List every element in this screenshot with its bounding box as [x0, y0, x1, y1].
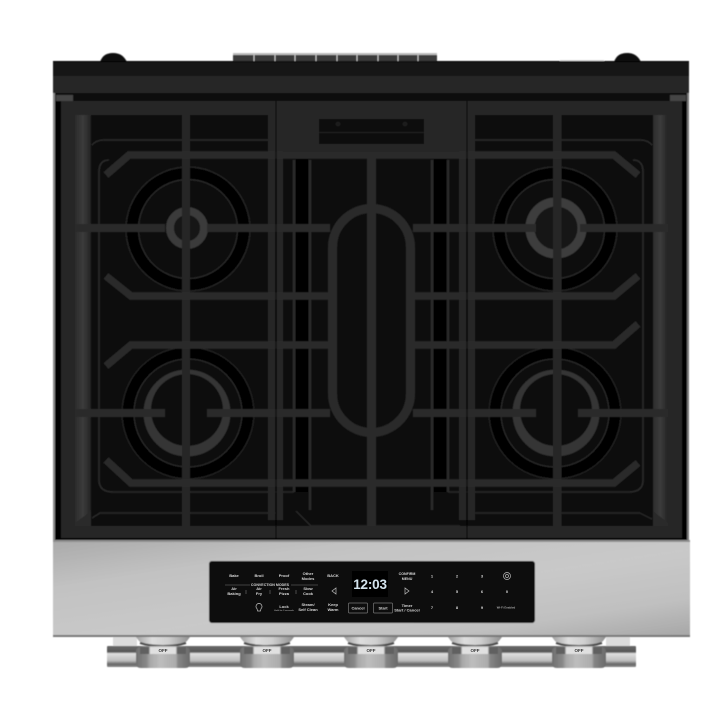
rear vent and feet — [100, 53, 641, 62]
knob labels: OFF — [262, 648, 272, 653]
handle rail — [107, 646, 636, 667]
lower function labels: Self Clean — [298, 607, 318, 612]
burner: rear left — [126, 167, 250, 291]
knob 4 — [448, 637, 502, 668]
convection labels: Slow — [303, 586, 314, 591]
start button — [374, 603, 392, 613]
icon: light bulb — [256, 604, 262, 611]
keypad: 5 — [456, 589, 459, 594]
cooking mode labels: Other — [303, 571, 314, 576]
cooking mode labels: BACK — [327, 573, 339, 578]
cooktop body — [53, 61, 689, 541]
clock display — [352, 571, 388, 597]
knobs — [136, 637, 606, 668]
seams — [276, 101, 467, 538]
knob 2 — [240, 637, 294, 668]
knob labels — [158, 648, 584, 653]
knob 5 — [552, 637, 606, 668]
keypad: 9 — [481, 605, 484, 610]
cooktop surface — [91, 115, 653, 526]
centre vertical bars — [268, 151, 275, 520]
side edges — [53, 93, 55, 540]
cancel button: Cancel — [351, 606, 365, 610]
brackets — [113, 637, 137, 648]
keypad: 2 — [456, 574, 459, 578]
burner: rear right — [493, 167, 617, 291]
convection labels — [227, 586, 314, 596]
keypad: 3 — [481, 574, 484, 578]
knob labels: OFF — [574, 648, 584, 653]
keypad: 8 — [456, 605, 459, 610]
confirm menu and timer: Timer — [402, 603, 413, 608]
burner: front right — [489, 347, 621, 479]
convection modes heading: CONVECTION MODES — [251, 583, 290, 587]
knob 3 — [344, 637, 398, 668]
convection labels: Air — [231, 586, 237, 591]
surface contour lines — [92, 140, 652, 526]
keypad: 6 — [481, 589, 484, 594]
knob labels: OFF — [158, 648, 168, 653]
lower function labels: Lock — [279, 604, 289, 609]
burner crossing verticals — [182, 115, 190, 526]
centre oval ring — [332, 208, 410, 432]
lower function labels — [274, 602, 339, 612]
cast iron grates — [61, 101, 682, 538]
steel control fascia — [53, 540, 690, 637]
keypad — [431, 574, 509, 610]
confirm menu and timer — [394, 572, 420, 612]
confirm menu and timer: MENU — [402, 577, 413, 581]
icon: settings ring — [504, 572, 510, 580]
convection labels: Air — [256, 586, 262, 591]
lower function labels: Keep — [328, 602, 338, 607]
burner: front left — [122, 347, 254, 479]
top trim — [53, 62, 689, 101]
control notch — [319, 119, 424, 144]
cooking mode labels: Bake — [229, 573, 240, 578]
control panel glass — [209, 561, 535, 623]
icon: right arrow — [405, 588, 409, 594]
convection labels: Fresh — [279, 586, 290, 591]
start button: Start — [378, 606, 388, 610]
lower function labels: Steam/ — [301, 602, 315, 607]
clock display: 12:03 — [353, 577, 387, 592]
frame — [61, 101, 682, 115]
lower function labels: Hold for 3 seconds — [274, 610, 295, 612]
top centre block — [268, 115, 475, 151]
cooking mode labels: Broil — [254, 573, 264, 578]
cancel button — [348, 603, 368, 613]
angled guards — [106, 155, 638, 483]
keypad: 7 — [431, 605, 434, 610]
control panel content — [225, 571, 516, 613]
cooking mode labels — [229, 571, 339, 581]
knob labels: OFF — [366, 648, 376, 653]
keypad: 1 — [431, 574, 434, 578]
keypad: 4 — [431, 589, 434, 594]
convection labels: Baking — [227, 591, 241, 596]
cross bars — [75, 224, 668, 417]
convection labels: Fry — [256, 591, 263, 596]
knob 1 — [136, 637, 190, 668]
confirm menu and timer: CONFIRM — [399, 572, 415, 576]
range illustration — [53, 53, 690, 668]
cooking mode labels: Modes — [302, 576, 315, 581]
knob labels: OFF — [470, 648, 480, 653]
convection labels: Cook — [303, 591, 314, 596]
lower function labels: Warm — [328, 607, 339, 612]
convection modes heading — [225, 583, 318, 587]
convection labels: Pizza — [279, 591, 290, 596]
wifi label: Wi-Fi Enabled — [497, 606, 516, 610]
keypad: 0 — [506, 589, 509, 594]
confirm menu and timer: Start / Cancel — [394, 608, 420, 612]
centre bar — [367, 155, 376, 526]
icon: left arrow — [332, 588, 336, 594]
cooking mode labels: Proof — [279, 573, 290, 578]
